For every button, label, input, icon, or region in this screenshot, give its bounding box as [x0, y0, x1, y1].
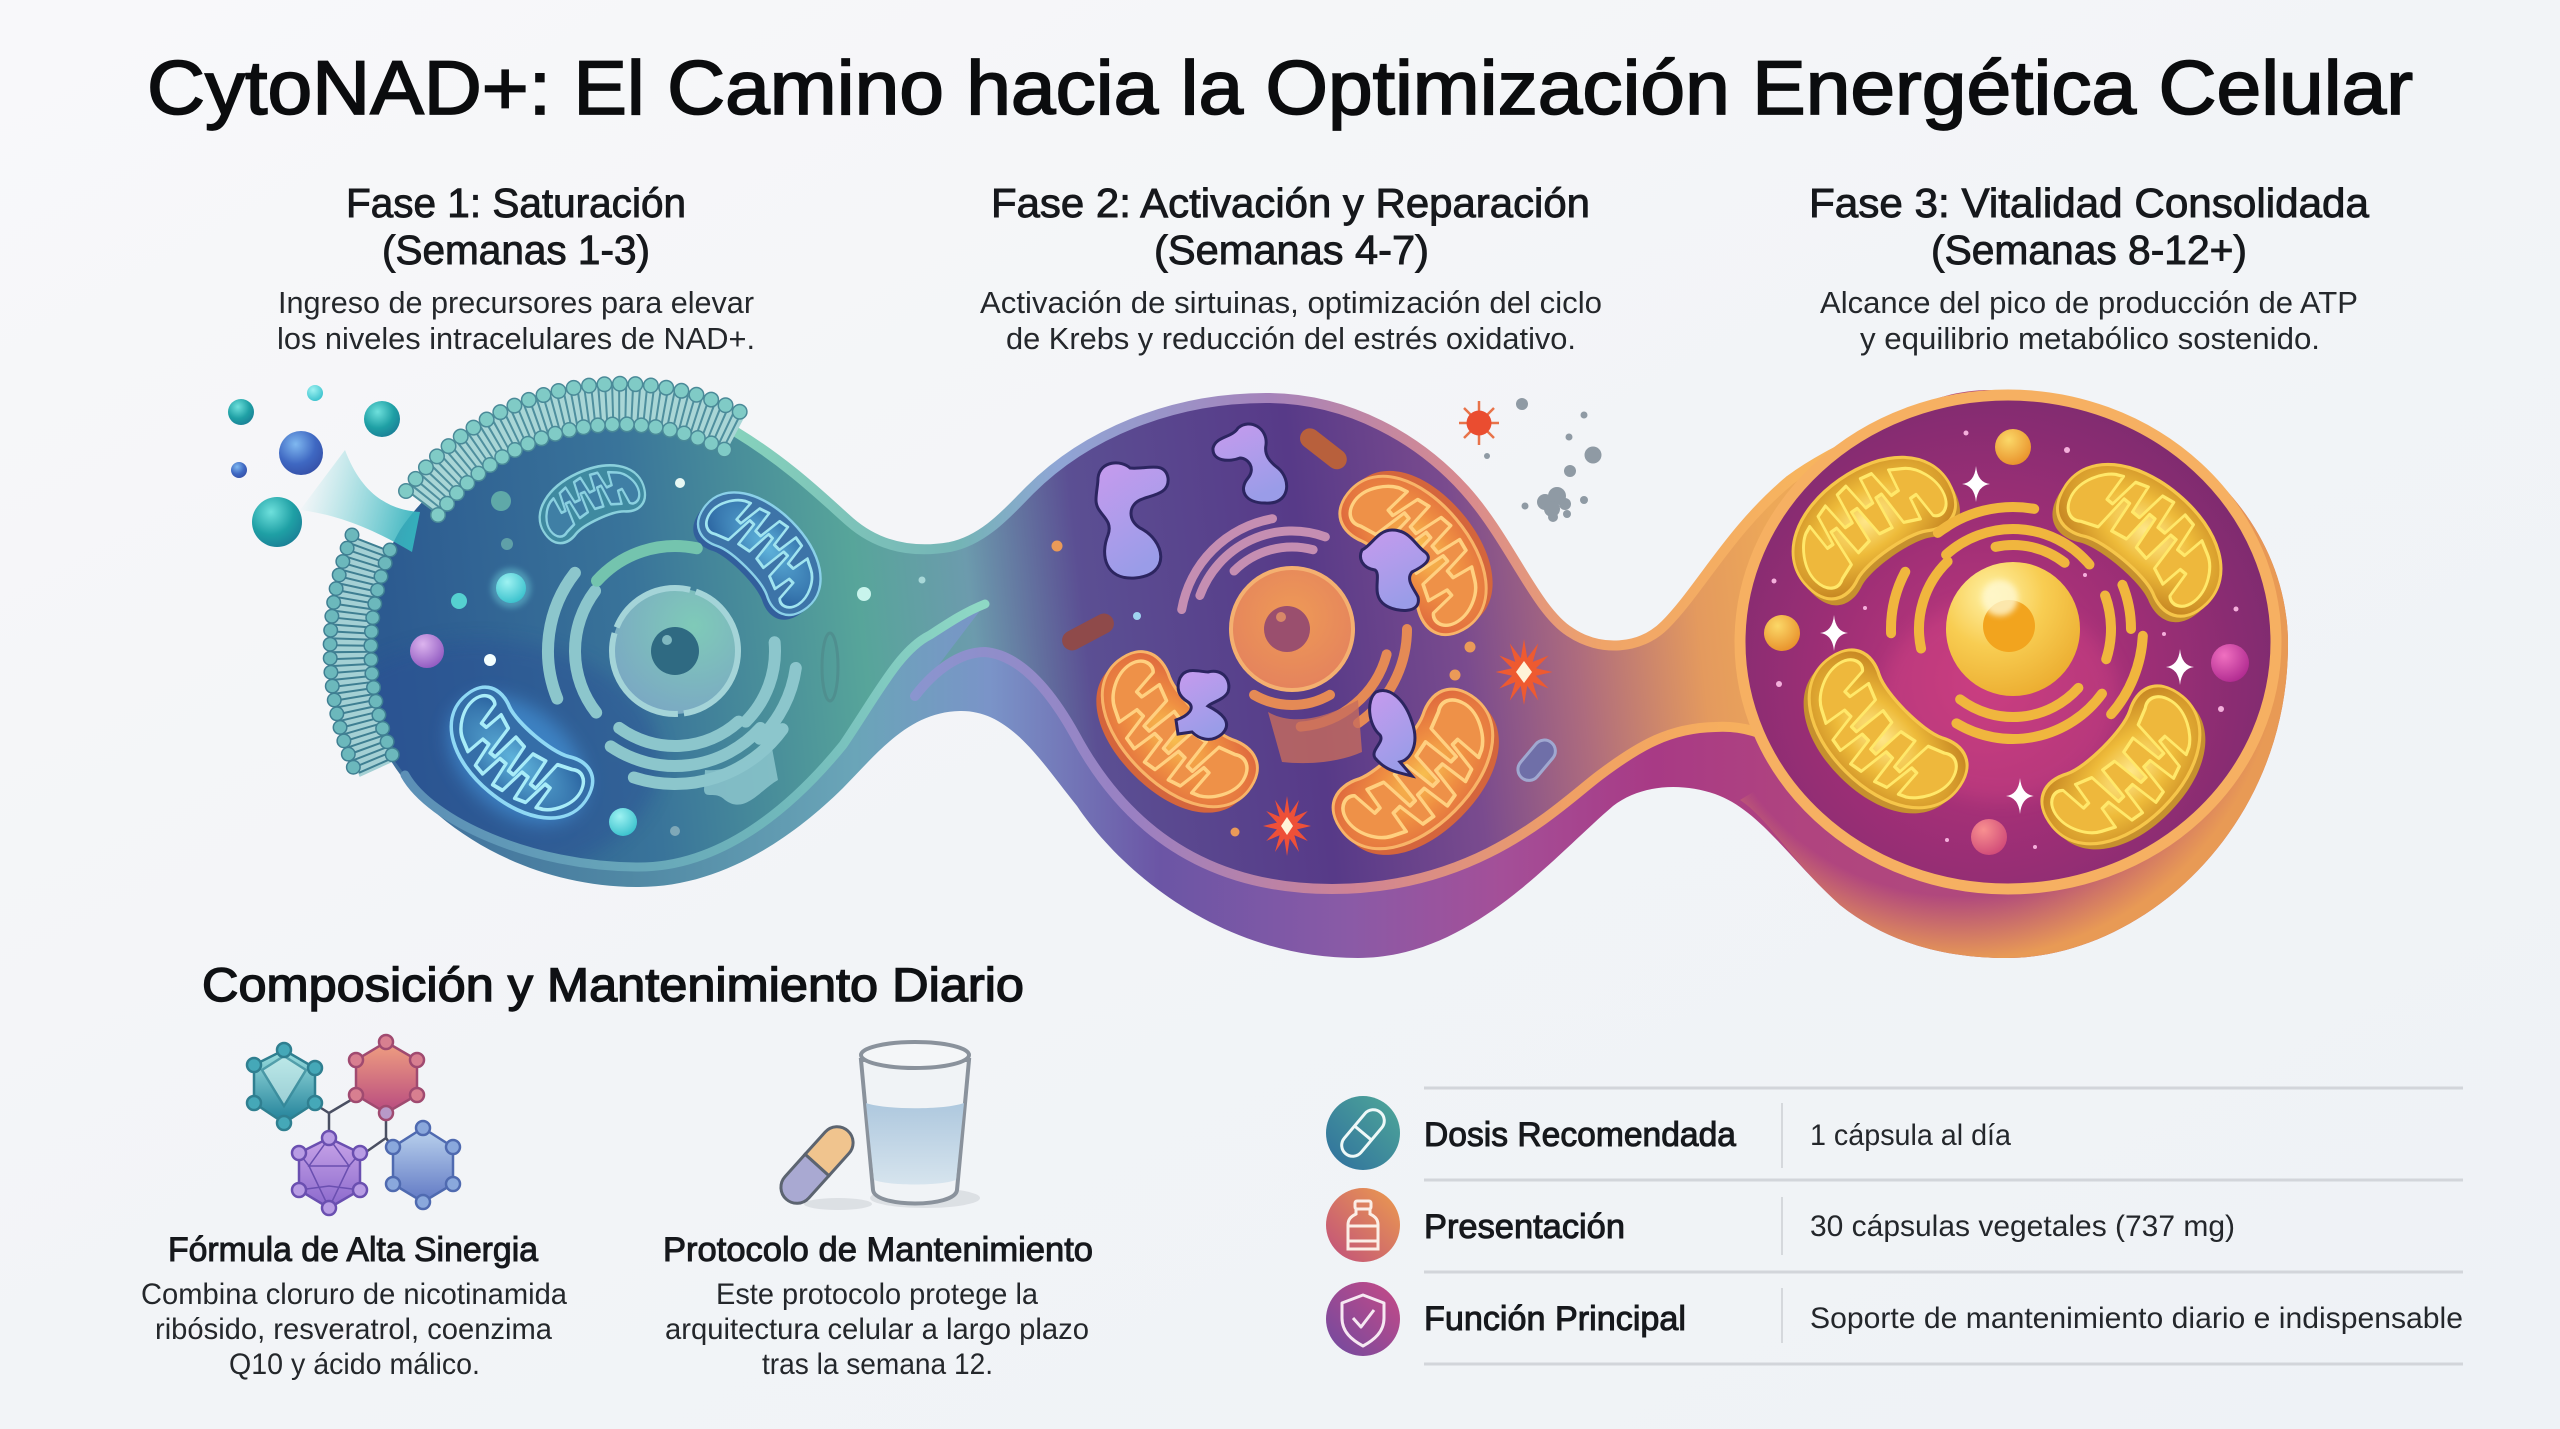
sirtuin protein 3 — [1361, 530, 1428, 610]
central pink glow — [1880, 600, 2120, 800]
nucleus — [1946, 562, 2080, 696]
cell journey illustration — [228, 384, 2288, 958]
endoplasmic reticulum — [1842, 458, 2184, 800]
description: Q10 y ácido málico. — [229, 1348, 480, 1381]
panel: maintenance protocol — [663, 1042, 1093, 1381]
value: 1 cápsula al día — [1810, 1119, 2011, 1152]
mitochondrion: bottom right — [2029, 673, 2234, 878]
mitochondrion: bottom left — [424, 670, 610, 850]
phase 1 heading and description: los niveles intracelulares de NAD+. — [277, 321, 755, 356]
phase 2 heading and description: Activación de sirtuinas, optimización del ciclo — [980, 285, 1602, 320]
oxidative burst bottom — [1263, 796, 1311, 856]
nucleus — [1231, 568, 1353, 690]
label: Dosis Recomendada — [1424, 1116, 1736, 1154]
sirtuin protein 4 — [1176, 670, 1229, 739]
blue shade of first cell — [440, 646, 660, 858]
icon: bottle — [1326, 1188, 1400, 1262]
phase 3 heading and description: (Semanas 8-12+) — [1931, 227, 2247, 273]
icon: molecule cluster — [247, 1035, 460, 1215]
oxidative burst right — [1496, 639, 1552, 705]
row: main function — [1326, 1282, 2463, 1356]
mitochondrion: top left — [1767, 429, 1972, 617]
top edge stroke — [736, 398, 1880, 646]
phase 3 heading and description: y equilibrio metabólico sostenido. — [1860, 321, 2320, 356]
description — [665, 1278, 1089, 1381]
value: Soporte de mantenimiento diario e indispensable — [1810, 1302, 2463, 1335]
golgi — [1268, 700, 1362, 763]
mitochondrion: bottom left — [1775, 637, 1980, 842]
value: 30 cápsulas vegetales (737 mg) — [1810, 1210, 2235, 1243]
endoplasmic reticulum — [1162, 499, 1422, 759]
phase 1 heading and description — [277, 180, 755, 356]
heading: Protocolo de Mantenimiento — [663, 1231, 1093, 1269]
third cell orange rim — [1740, 390, 2288, 958]
sirtuin protein 2 — [1213, 424, 1287, 503]
phase 3 heading and description: Fase 3: Vitalidad Consolidada — [1809, 180, 2369, 226]
mitochondrion: top left — [527, 450, 651, 549]
phase 2 heading and description — [980, 180, 1602, 356]
nucleus — [612, 588, 738, 714]
membrane bilayer top arc — [406, 384, 746, 515]
icon: capsule and glass of water — [774, 1042, 980, 1210]
description: Este protocolo protege la — [716, 1278, 1038, 1311]
phase 2 heading and description: Fase 2: Activación y Reparación — [991, 180, 1590, 226]
mitochondrion: top right — [1328, 444, 1520, 647]
title: CytoNAD+: El Camino hacia la Optimización Energética Celular — [147, 46, 2413, 131]
cell lumen — [367, 398, 1880, 889]
panel: phase 1 saturation cell — [228, 384, 926, 850]
row: dose — [1326, 1096, 2011, 1170]
phase 1 heading and description: (Semanas 1-3) — [382, 227, 650, 273]
vesicles — [410, 478, 926, 836]
row: presentation — [1326, 1188, 2235, 1262]
second cell lower edge — [915, 652, 1790, 889]
mitochondrion: bottom left — [1069, 639, 1270, 840]
panel: specification table — [1326, 1088, 2463, 1364]
mitochondrion: top right — [2040, 435, 2249, 634]
description — [141, 1278, 567, 1381]
small capsule — [822, 633, 838, 701]
panel: phase 3 vitality cell — [1740, 395, 2276, 889]
cell interior — [1740, 395, 2276, 889]
first cell lower edge — [405, 604, 985, 867]
icon: shield with check — [1326, 1282, 1400, 1356]
precursor funnel — [300, 450, 420, 552]
membrane bilayer left arc — [330, 535, 395, 778]
grey debris particles — [1484, 398, 1602, 522]
small orange dots — [1052, 540, 1476, 836]
outer silhouette band — [380, 390, 2288, 958]
sirtuin protein 1 — [1096, 463, 1168, 578]
mitochondrion: top right — [684, 470, 843, 629]
description: Combina cloruro de nicotinamida — [141, 1278, 567, 1311]
phase 3 heading and description: Alcance del pico de producción de ATP — [1820, 285, 2358, 320]
spheres — [1764, 429, 2249, 855]
heading: Fórmula de Alta Sinergia — [168, 1231, 538, 1269]
description: ribósido, resveratrol, coenzima — [155, 1313, 552, 1346]
description: tras la semana 12. — [762, 1348, 993, 1381]
phase 1 heading and description: Ingreso de precursores para elevar — [278, 285, 754, 320]
free radical sun — [1459, 401, 1499, 445]
phase 3 heading and description — [1809, 180, 2369, 356]
damaged small organelles — [1059, 424, 1560, 785]
sparkles — [1772, 430, 2238, 849]
phase 1 heading and description: Fase 1: Saturación — [346, 180, 686, 226]
label: Función Principal — [1424, 1300, 1686, 1338]
icon: pill — [1326, 1096, 1400, 1170]
phase 2 heading and description: (Semanas 4-7) — [1154, 227, 1429, 273]
mitochondrion: bottom right — [1321, 677, 1528, 884]
golgi — [704, 748, 778, 805]
label: Presentación — [1424, 1208, 1625, 1246]
endoplasmic reticulum — [489, 465, 861, 837]
precursor molecules — [228, 385, 400, 547]
panel: synergy formula — [141, 1035, 567, 1381]
description: arquitectura celular a largo plazo — [665, 1313, 1089, 1346]
panel: phase 2 activation cell — [1052, 398, 1602, 884]
section heading: Composición y Mantenimiento Diario — [202, 958, 1024, 1011]
sirtuin protein 5 — [1370, 691, 1415, 776]
phase 2 heading and description: de Krebs y reducción del estrés oxidativo. — [1006, 321, 1576, 356]
